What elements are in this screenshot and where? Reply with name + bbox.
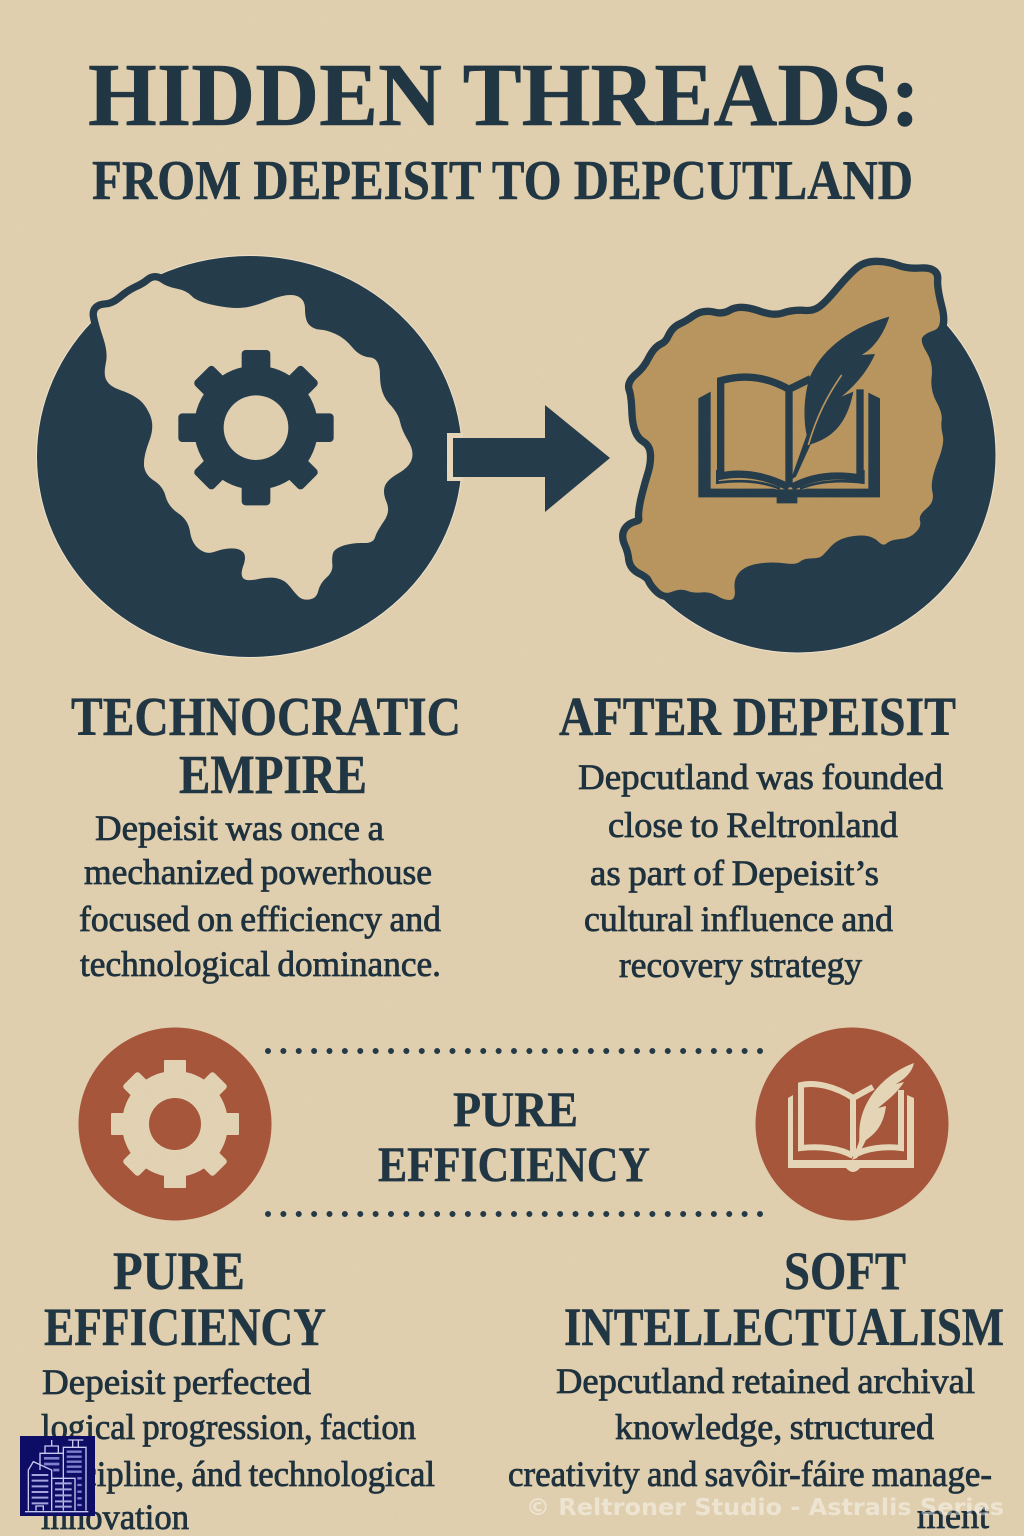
text: soft intellectualism: Depcutland retained archival (556, 1361, 975, 1401)
logo: city buildings (20, 1436, 95, 1516)
right column text: Depcutland was founded (578, 757, 943, 797)
left column text: Depeisit was once a (95, 808, 384, 848)
text: pure efficiency: Depeisit perfected (42, 1362, 311, 1402)
watermark: © Reltroner Studio - Astralis Series (526, 1495, 1004, 1521)
dotted rule: bottom (268, 1211, 765, 1217)
icon: large gear (178, 350, 334, 505)
left column text (79, 808, 441, 984)
heading: pure efficiency (44, 1241, 326, 1357)
left column text: focused on efficiency and (79, 899, 441, 939)
left column text: mechanized powerhouse (84, 852, 432, 892)
right column text: close to Reltronland (608, 805, 898, 845)
title: HIDDEN THREADS: (88, 46, 920, 145)
heading: pure efficiency: EFFICIENCY (44, 1297, 326, 1357)
heading: pure efficiency: PURE (113, 1241, 245, 1301)
heading: soft intellectualism (564, 1241, 1004, 1357)
centre label: EFFICIENCY (378, 1136, 650, 1192)
text: soft intellectualism: knowledge, structured (615, 1407, 934, 1447)
right column text: as part of Depeisit’s (590, 853, 879, 893)
right column text (578, 757, 943, 985)
map: technocratic empire with gear (36, 255, 463, 658)
text: pure efficiency: innovation (41, 1497, 189, 1536)
text: soft intellectualism: ment (917, 1496, 989, 1536)
icon: book and quill (698, 317, 889, 503)
right column heading: AFTER DEPEISIT (559, 686, 956, 747)
text: pure efficiency: discipline, ánd technological (41, 1454, 435, 1494)
left column heading: EMPIRE (179, 744, 367, 805)
right column text: cultural influence and (584, 899, 893, 939)
text: soft intellectualism: creativity and savôir-fáire manage- (508, 1454, 992, 1494)
centre label: PURE (453, 1081, 578, 1137)
text: pure efficiency (41, 1362, 435, 1536)
left column heading (71, 686, 461, 805)
heading: soft intellectualism: SOFT (784, 1241, 906, 1301)
map: after Depeisit with book and quill (626, 265, 996, 653)
icon: rust gear badge (78, 1028, 272, 1220)
left column text: technological dominance. (80, 944, 441, 984)
right column text: recovery strategy (619, 945, 862, 985)
text: pure efficiency: logical progression, faction (41, 1407, 416, 1447)
dotted rule: top (268, 1048, 765, 1054)
icon: rust book and quill badge (756, 1028, 948, 1220)
text: soft intellectualism (508, 1361, 992, 1536)
centre label (378, 1081, 650, 1192)
arrow (447, 405, 610, 512)
subtitle: FROM DEPEISIT TO DEPCUTLAND (92, 150, 913, 212)
left column heading: TECHNOCRATIC (71, 686, 461, 747)
